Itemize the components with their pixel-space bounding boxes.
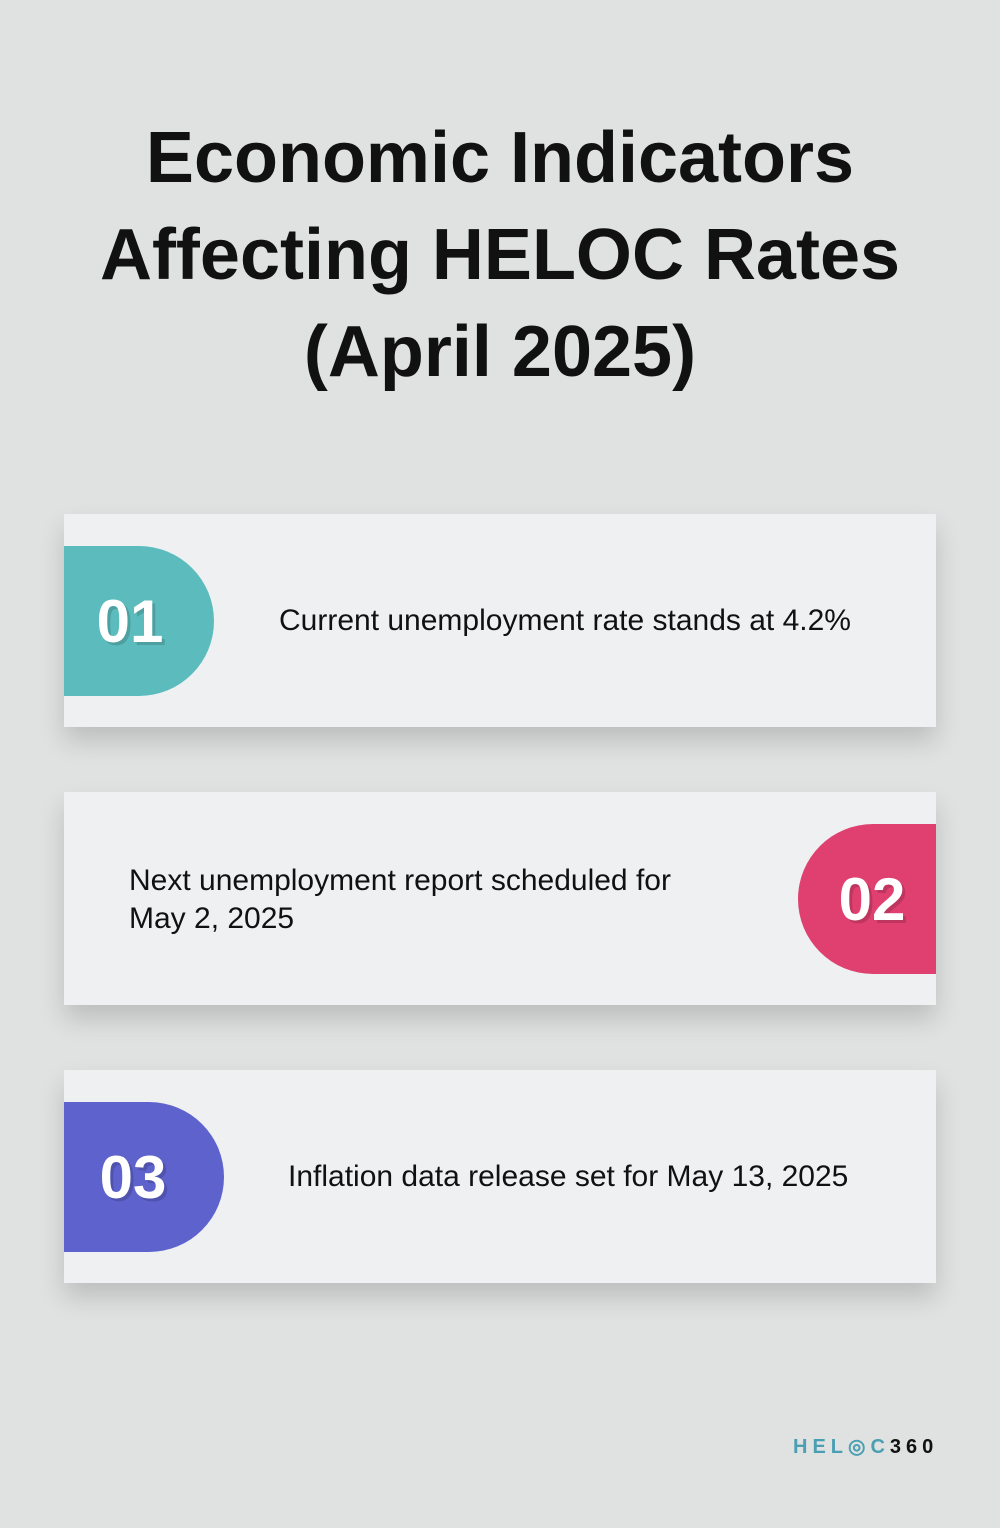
badge 03 [64,1102,224,1252]
badge 01: 01 [97,588,163,654]
text 2: May 2, 2025 [129,902,294,935]
title [100,118,900,392]
card 3 [64,1070,936,1283]
badge 01 [64,546,214,696]
title: Economic Indicators [146,118,854,198]
badge 03: 03 [100,1144,166,1210]
text 2: Next unemployment report scheduled for [129,864,671,897]
badge 02: 02 [839,866,905,932]
badge 02 [798,824,936,974]
text 3: Inflation data release set for May 13, 2025 [288,1160,848,1193]
text 2 [129,864,671,935]
logo: HEL◎C360 [793,1436,938,1458]
title: Affecting HELOC Rates [100,215,900,295]
card 2 [64,792,936,1005]
title: (April 2025) [304,312,696,392]
card 1 [64,514,936,727]
text 1: Current unemployment rate stands at 4.2% [279,604,851,637]
